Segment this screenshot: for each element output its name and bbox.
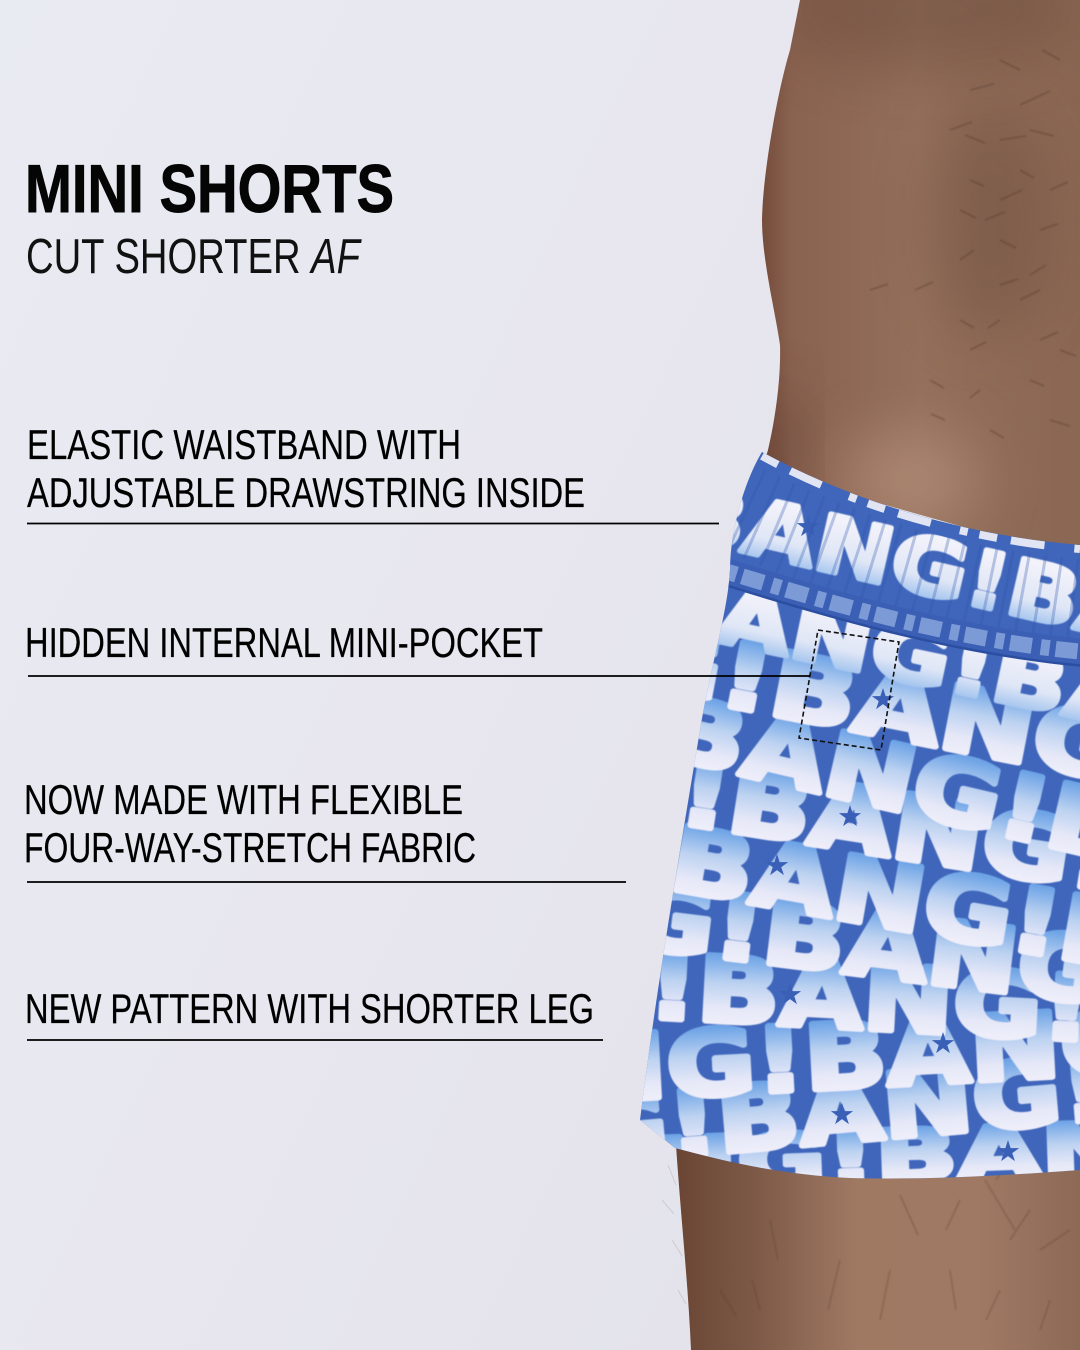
- subtitle: CUT SHORTER AF: [26, 229, 362, 284]
- stars: ★: [870, 682, 896, 716]
- torso: [750, 0, 1080, 570]
- shorts pattern rows: [640, 498, 1080, 1178]
- feature: pattern: NEW PATTERN WITH SHORTER LEG: [25, 985, 594, 1032]
- thigh hair: [772, 1175, 1070, 1330]
- pocket outline dashed: [799, 630, 899, 750]
- stars: [764, 509, 1021, 1168]
- stars: ★: [795, 509, 821, 543]
- stray leg hairs: [662, 1165, 686, 1304]
- thigh: [676, 1148, 1080, 1350]
- feature: waistband: [27, 421, 719, 524]
- torso hair: [870, 50, 1076, 438]
- stars: ★: [930, 1026, 956, 1060]
- feature: pocket: HIDDEN INTERNAL MINI-POCKET: [25, 619, 543, 666]
- waistband top edge: [762, 458, 1080, 551]
- feature: waistband: ELASTIC WAISTBAND WITH: [27, 421, 461, 468]
- feature: waistband: ADJUSTABLE DRAWSTRING INSIDE: [27, 469, 585, 516]
- waistband gathers: [745, 510, 1080, 605]
- stars: ★: [764, 848, 790, 882]
- feature: fabric: [24, 776, 626, 882]
- shorts: [640, 452, 1080, 1178]
- title: MINI SHORTS: [25, 151, 394, 227]
- feature: fabric: FOUR-WAY-STRETCH FABRIC: [24, 824, 476, 871]
- stars: ★: [837, 799, 863, 833]
- waistband seam: [728, 572, 1080, 652]
- stars: ★: [829, 1097, 855, 1131]
- stars: ★: [777, 977, 803, 1011]
- feature: fabric: NOW MADE WITH FLEXIBLE: [24, 776, 463, 823]
- stars: ★: [995, 1134, 1021, 1168]
